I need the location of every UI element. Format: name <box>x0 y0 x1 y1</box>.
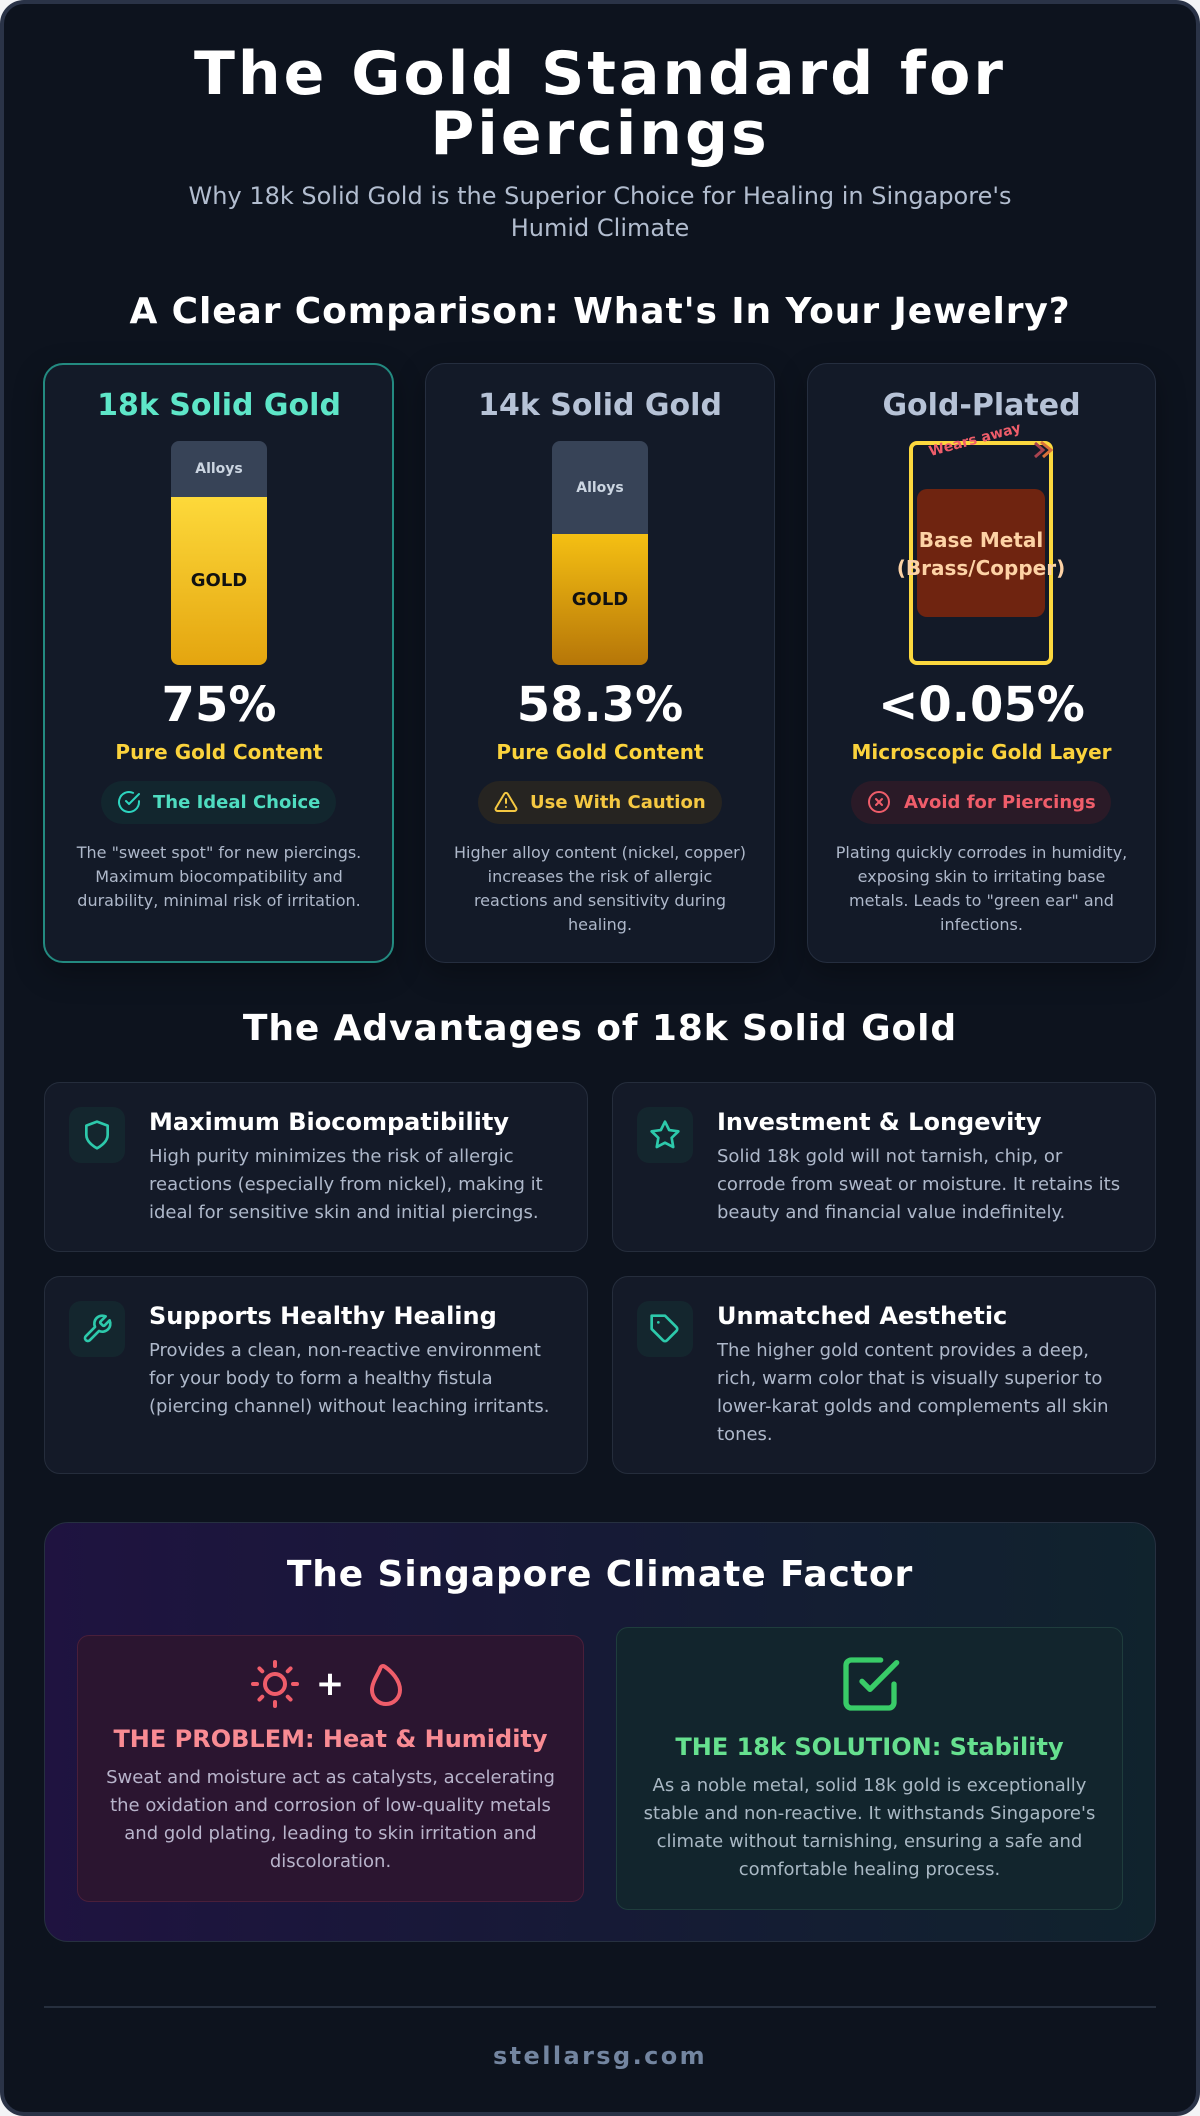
advantage text <box>149 1340 549 1417</box>
solution text: stable and non-reactive. It withstands Singapore's <box>644 1803 1095 1824</box>
panel: singapore climate factor <box>44 1522 1156 1942</box>
advantage text <box>716 1340 1109 1445</box>
gold segment <box>171 497 267 665</box>
badge text: Use With Caution <box>530 792 706 813</box>
box: the solution <box>616 1627 1123 1910</box>
wears away label: Wears away <box>927 420 1023 460</box>
bar: 14k composition <box>552 441 648 665</box>
alloys segment: Alloys <box>195 461 243 477</box>
badge: caution <box>478 781 722 824</box>
description: durability, minimal risk of irritation. <box>77 891 361 910</box>
problem text: Sweat and moisture act as catalysts, accelerating <box>106 1767 555 1788</box>
alloys segment <box>552 441 648 534</box>
base metal block <box>917 489 1045 617</box>
advantage text: reactions (especially from nickel), making it <box>149 1174 543 1195</box>
solution text <box>644 1775 1095 1880</box>
icon box: star <box>637 1107 693 1163</box>
advantage text <box>717 1146 1120 1223</box>
subtitle: Why 18k Solid Gold is the Superior Choice for Healing in Singapore's <box>189 182 1011 210</box>
icon: check circle <box>118 791 140 813</box>
advantage text: ideal for sensitive skin and initial piercings. <box>149 1202 539 1223</box>
advantage title: Investment & Longevity <box>717 1108 1042 1136</box>
problem title: THE PROBLEM: Heat & Humidity <box>113 1725 548 1753</box>
icon box: wrench <box>69 1301 125 1357</box>
title: Piercings <box>430 99 770 169</box>
problem text: discoloration. <box>270 1851 391 1872</box>
description: Plating quickly corrodes in humidity, <box>836 843 1127 862</box>
advantage text: corrode from sweat or moisture. It retains its <box>717 1174 1120 1195</box>
icon: warning triangle <box>494 792 518 812</box>
heading: advantages: The Advantages of 18k Solid Gold <box>243 1008 957 1049</box>
advantage text: Solid 18k gold will not tarnish, chip, or <box>717 1146 1062 1167</box>
title: The Gold Standard for <box>194 39 1006 109</box>
advantage text: tones. <box>717 1424 773 1445</box>
panel: gold-plated <box>807 363 1156 963</box>
base metal label: Base Metal <box>919 528 1043 552</box>
description: exposing skin to irritating base <box>858 867 1105 886</box>
icon: wear chevrons <box>1034 440 1054 458</box>
diagram: plating cross-section <box>897 420 1065 665</box>
description <box>836 843 1127 934</box>
stat label: Pure Gold Content <box>496 740 704 764</box>
solution text: comfortable healing process. <box>739 1859 1000 1880</box>
stat: 58.3%: 58.3% <box>517 677 683 733</box>
advantage title: Unmatched Aesthetic <box>717 1302 1007 1330</box>
stat: 75%: 75% <box>162 677 276 733</box>
description <box>76 843 361 910</box>
description: infections. <box>940 915 1023 934</box>
footer: stellarsg.com <box>493 2042 707 2070</box>
heading: climate: The Singapore Climate Factor <box>287 1554 913 1595</box>
icon: droplet <box>370 1664 402 1706</box>
base metal label <box>897 528 1065 580</box>
icon: sun <box>251 1660 299 1708</box>
subtitle <box>189 182 1011 242</box>
description: metals. Leads to "green ear" and <box>849 891 1114 910</box>
description: healing. <box>568 915 632 934</box>
stat label: Microscopic Gold Layer <box>851 740 1112 764</box>
description: Maximum biocompatibility and <box>95 867 343 886</box>
advantage text: lower-karat golds and complements all skin <box>717 1396 1109 1417</box>
gold segment <box>552 534 648 665</box>
problem text: the oxidation and corrosion of low-quality metals <box>110 1795 551 1816</box>
advantage text: The higher gold content provides a deep, <box>717 1340 1089 1361</box>
box: the problem <box>77 1635 584 1902</box>
icon box: shield <box>69 1107 125 1163</box>
badge text: The Ideal Choice <box>153 792 320 813</box>
base metal label: (Brass/Copper) <box>897 556 1065 580</box>
advantage text: Provides a clean, non-reactive environment <box>149 1340 541 1361</box>
badge: avoid <box>851 781 1111 824</box>
icon box: tag <box>637 1301 693 1357</box>
advantage title: Maximum Biocompatibility <box>149 1108 509 1136</box>
bar: 18k composition <box>171 441 267 665</box>
advantage: healing <box>44 1276 588 1474</box>
stat: under 0.05%: <0.05% <box>878 677 1085 733</box>
alloys segment <box>171 441 267 497</box>
alloys segment: Alloys <box>576 480 624 496</box>
advantage text: rich, warm color that is visually superior to <box>717 1368 1102 1389</box>
badge: ideal choice <box>101 781 336 824</box>
advantage text: High purity minimizes the risk of allergic <box>149 1146 514 1167</box>
card title: 14k: 14k Solid Gold <box>478 388 722 423</box>
problem text <box>106 1767 555 1872</box>
card title: 18k: 18k Solid Gold <box>97 388 341 423</box>
description: reactions and sensitivity during <box>474 891 726 910</box>
problem text: and gold plating, leading to skin irritation and <box>124 1823 537 1844</box>
gold segment: GOLD <box>572 589 628 610</box>
description: Higher alloy content (nickel, copper) <box>454 843 746 862</box>
heading: comparison: A Clear Comparison: What's In Your Jewelry? <box>129 291 1071 332</box>
solution title: THE 18k SOLUTION: Stability <box>675 1733 1064 1761</box>
card title: plated: Gold-Plated <box>882 388 1081 423</box>
subtitle: Humid Climate <box>511 214 689 242</box>
description: The "sweet spot" for new piercings. <box>77 843 361 862</box>
advantage title: Supports Healthy Healing <box>149 1302 497 1330</box>
advantage text: for your body to form a healthy fistula <box>149 1368 493 1389</box>
solution text: As a noble metal, solid 18k gold is exceptionally <box>653 1775 1086 1796</box>
description <box>454 843 746 934</box>
advantage text: beauty and financial value indefinitely. <box>717 1202 1065 1223</box>
panel: 14k solid gold <box>425 363 775 963</box>
advantage: longevity <box>612 1082 1156 1252</box>
advantage: aesthetic <box>612 1276 1156 1474</box>
solution text: climate without tarnishing, ensuring a safe and <box>657 1831 1082 1852</box>
icon: check square <box>843 1657 900 1711</box>
advantage: biocompatibility <box>44 1082 588 1252</box>
panel: 18k solid gold <box>43 363 394 963</box>
title <box>194 39 1006 169</box>
advantage text: (piercing channel) without leaching irritants. <box>149 1396 549 1417</box>
advantage text <box>149 1146 543 1223</box>
badge text: Avoid for Piercings <box>904 792 1096 813</box>
gold segment: GOLD <box>191 570 247 591</box>
stat label: Pure Gold Content <box>115 740 323 764</box>
gold layer outline <box>909 441 1053 665</box>
plus sign: + <box>316 1664 344 1704</box>
description: increases the risk of allergic <box>488 867 712 886</box>
icon: x circle <box>868 791 890 813</box>
